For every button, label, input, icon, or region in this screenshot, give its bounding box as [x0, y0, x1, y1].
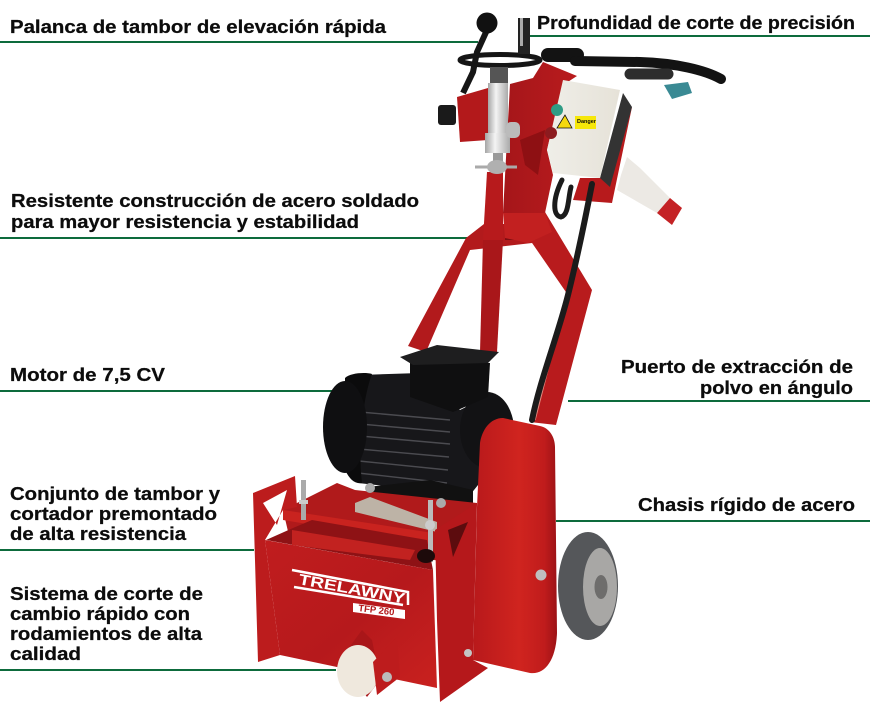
- front panel: [265, 540, 437, 688]
- left flange with handle: [253, 476, 297, 662]
- connector: teal: [664, 82, 692, 99]
- frame: red tubes: [408, 62, 592, 425]
- wheel: [558, 532, 618, 640]
- base frame and deck: [266, 480, 477, 570]
- callout: Conjunto de tambor: de alta resistencia: [10, 524, 187, 544]
- callout: Conjunto de tambor: cortador premontado: [10, 504, 217, 524]
- motor mount: [367, 480, 473, 515]
- callout: construcción de acero: Resistente construcción de acero soldado: [11, 191, 419, 211]
- machine: planer: [253, 12, 721, 702]
- brand logo: [292, 570, 408, 619]
- callout: Sistema de corte: rodamientos de alta: [10, 624, 203, 644]
- callout: Conjunto de tambor: Conjunto de tambor y: [10, 484, 220, 504]
- casing bolt: [536, 570, 546, 580]
- callout: Motor: Motor de 7,5 CV: [10, 365, 165, 385]
- callout: Sistema de corte: Sistema de corte de: [10, 584, 203, 604]
- terminal box: [400, 345, 499, 412]
- lower bolt: [464, 649, 472, 657]
- callout: Sistema de corte: calidad: [10, 644, 81, 664]
- callout: Puerto de extracción: [568, 357, 870, 401]
- side plate hole: [448, 522, 468, 557]
- callout: construcción de acero: para mayor resistencia y estabilidad: [11, 212, 359, 232]
- front roller: [337, 630, 400, 697]
- callout: construcción de acero: [0, 191, 468, 238]
- tall belt casing: [473, 418, 557, 673]
- callout: Sistema de corte: cambio rápido con: [10, 604, 190, 624]
- brand logo: TFP 260: [358, 603, 395, 618]
- callout: Palanca de tambor: Palanca de tambor de elevación rápida: [10, 17, 387, 37]
- control box back plate: [573, 107, 632, 203]
- cables: [532, 180, 592, 420]
- handlebar: [548, 55, 721, 79]
- callout: Profundidad de corte: Profundidad de corte de precisión: [537, 13, 855, 33]
- handwheel and lever: [460, 12, 540, 93]
- callout: Puerto de extracción: polvo en ángulo: [700, 378, 853, 398]
- callout: Puerto de extracción: Puerto de extracción de: [621, 357, 853, 377]
- motor: [323, 345, 514, 515]
- callout: Chasis: Chasis rígido de acero: [638, 495, 855, 515]
- brand logo: TRELAWNY: [297, 571, 407, 608]
- dust port: [617, 157, 682, 225]
- callout: Conjunto de tambor: [0, 484, 254, 550]
- side plate: [435, 503, 488, 702]
- control box: [545, 80, 632, 187]
- control box: Danger: [577, 119, 597, 125]
- callout: Sistema de corte: [0, 584, 336, 670]
- depth gauge: chrome column: [438, 67, 520, 174]
